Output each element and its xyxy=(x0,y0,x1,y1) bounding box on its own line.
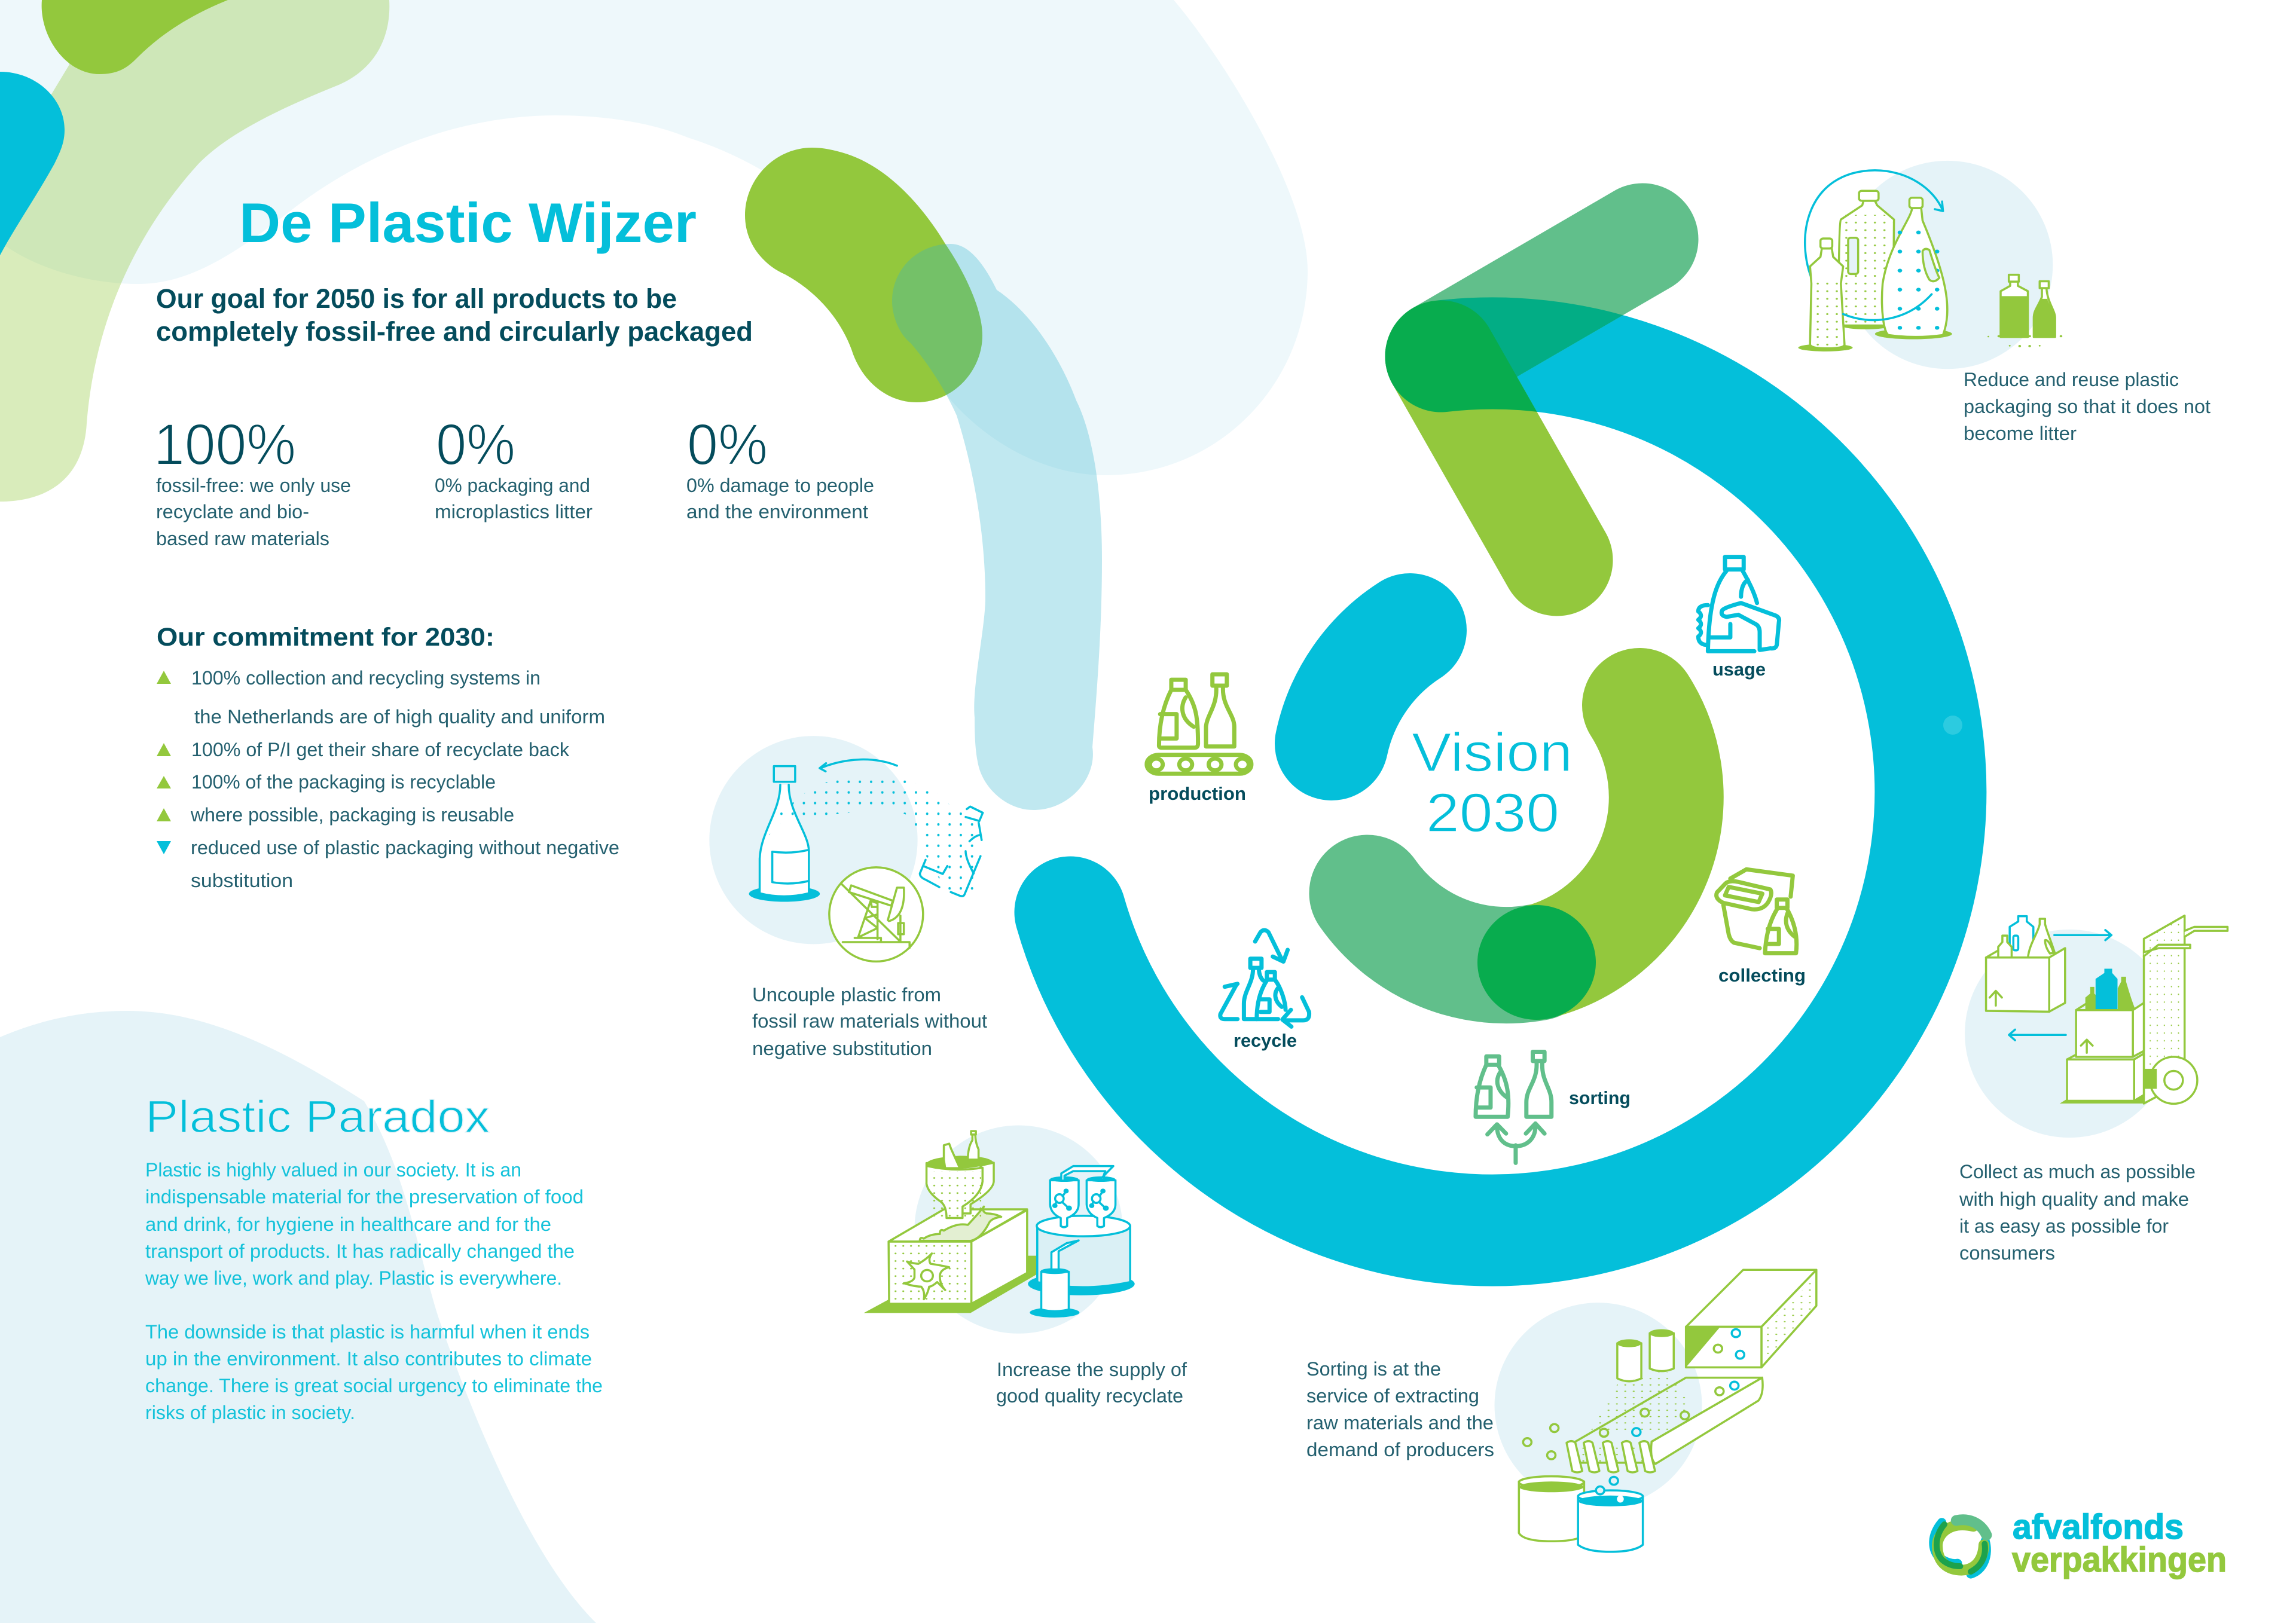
Plastic Paradox heading: Plastic Paradox xyxy=(145,1092,490,1142)
caption: uncouple xyxy=(752,984,987,1059)
logo wordmark xyxy=(2012,1508,2227,1579)
center text: Vision 2030: Vision xyxy=(1412,722,1573,783)
caption: recyclate: good quality recyclate xyxy=(996,1385,1183,1407)
subtitle: goal for 2050: completely fossil-free and circularly packaged xyxy=(156,316,753,347)
caption: uncouple: Uncouple plastic from xyxy=(752,984,941,1005)
step label: collecting: collecting xyxy=(1718,965,1806,986)
background: green corner blob xyxy=(42,0,228,74)
commitment list: substitution xyxy=(191,870,293,891)
caption: uncouple: fossil raw materials without xyxy=(752,1010,987,1032)
illustration: reduce and reuse bottles xyxy=(1798,161,2062,369)
caption: reduce and reuse: become litter xyxy=(1964,423,2077,444)
caption: recyclate: Increase the supply of xyxy=(997,1359,1187,1380)
illustration: sorting conveyor xyxy=(1495,1270,1816,1552)
stat: 0% damage: and the environment xyxy=(686,501,868,522)
stat: 0% damage xyxy=(686,412,874,522)
inner cycle: green arc xyxy=(1537,705,1666,962)
step label: production: production xyxy=(1149,783,1246,804)
step icon: collecting xyxy=(1717,869,1797,953)
center text: Vision 2030 xyxy=(1412,722,1573,843)
Plastic Paradox text: transport of products. It has radically changed the xyxy=(145,1240,575,1262)
step icon: recycle xyxy=(1220,930,1309,1026)
caption: collect: Collect as much as possible xyxy=(1959,1161,2196,1182)
caption: reduce and reuse: Reduce and reuse plastic xyxy=(1964,369,2179,390)
caption: collect: consumers xyxy=(1959,1242,2055,1264)
caption: collect: with high quality and make xyxy=(1959,1188,2189,1210)
subtitle: goal for 2050 xyxy=(156,283,753,347)
stat: 0% litter: microplastics litter xyxy=(435,501,593,522)
commitment list: where possible, packaging is reusable xyxy=(190,804,514,826)
Plastic Paradox text: up in the environment. It also contributes to climate xyxy=(145,1348,592,1370)
inner cycle: blue arc xyxy=(1332,630,1410,744)
commitment list: 100% of the packaging is recyclable xyxy=(191,771,496,793)
step icon: usage xyxy=(1698,557,1779,651)
Plastic Paradox text: risks of plastic in society. xyxy=(145,1402,355,1423)
background: light green swoosh xyxy=(0,0,389,502)
illustration: collection trolley and boxes xyxy=(1965,916,2228,1138)
caption: collect xyxy=(1959,1161,2196,1264)
Plastic Paradox text: Plastic is highly valued in our society. It is an xyxy=(145,1159,521,1181)
step icon: production xyxy=(1147,674,1251,774)
stat: 0% litter: 0% xyxy=(436,412,515,477)
commitment list: 100% of P/I get their share of recyclate back xyxy=(191,739,570,760)
stat: 0% litter xyxy=(435,412,593,522)
stat: 100% fossil-free: recyclate and bio- xyxy=(156,501,309,522)
step icon: sorting xyxy=(1476,1052,1552,1163)
outer cycle diagram: ring and bars xyxy=(1070,239,1962,1230)
stat: 100% fossil-free: fossil-free: we only use xyxy=(156,475,351,496)
logo wordmark: afvalfonds xyxy=(2013,1508,2184,1546)
stat: 0% litter: 0% packaging and xyxy=(435,475,590,496)
caption: uncouple: negative substitution xyxy=(752,1038,932,1059)
caption: reduce and reuse: packaging so that it does not xyxy=(1964,396,2210,417)
inner cycle: dark green overlap xyxy=(1477,905,1596,1020)
logo mark xyxy=(1934,1520,1986,1574)
commitment heading: Our commitment for 2030: xyxy=(157,623,494,652)
caption: sorting: service of extracting xyxy=(1306,1385,1479,1407)
step label: sorting: sorting xyxy=(1569,1087,1631,1108)
stat: 100% fossil-free xyxy=(154,412,351,549)
commitment list: 100% collection and recycling systems in xyxy=(191,667,541,689)
center text: Vision 2030: 2030 xyxy=(1426,783,1559,843)
background: pale blue top blob xyxy=(0,0,1308,475)
subtitle: goal for 2050: Our goal for 2050 is for all products to be xyxy=(156,283,677,314)
caption: sorting xyxy=(1306,1358,1494,1460)
caption: sorting: demand of producers xyxy=(1306,1439,1494,1460)
caption: reduce and reuse xyxy=(1964,369,2210,444)
commitment list: the Netherlands are of high quality and uniform xyxy=(194,706,605,728)
title: De Plastic Wijzer xyxy=(239,191,697,254)
Plastic Paradox text xyxy=(145,1159,603,1423)
illustration: recycling plant xyxy=(864,1126,1135,1334)
Plastic Paradox text: and drink, for hygiene in healthcare and for the xyxy=(145,1214,551,1235)
stat: 100% fossil-free: 100% xyxy=(154,412,296,477)
commitment list xyxy=(157,667,619,891)
decorative green blob near the title xyxy=(745,148,982,402)
decorative translucent blue band xyxy=(892,244,1102,810)
commitment list: reduced use of plastic packaging without negative xyxy=(191,837,619,858)
stat: 0% damage: 0% damage to people xyxy=(686,475,874,496)
step label: usage: usage xyxy=(1712,659,1766,680)
illustration: uncouple from fossil xyxy=(709,736,983,961)
Plastic Paradox text: The downside is that plastic is harmful when it ends xyxy=(145,1321,590,1343)
logo wordmark: verpakkingen xyxy=(2012,1541,2227,1579)
Plastic Paradox text: indispensable material for the preservation of food xyxy=(145,1186,584,1208)
caption: sorting: Sorting is at the xyxy=(1306,1358,1441,1380)
Plastic Paradox text: change. There is great social urgency to eliminate the xyxy=(145,1375,603,1396)
background: cyan edge blob xyxy=(0,72,65,255)
stat: 0% damage: 0% xyxy=(687,412,768,477)
background: pale blue bottom-left blob xyxy=(0,1011,596,1623)
caption: recyclate xyxy=(996,1359,1187,1407)
caption: collect: it as easy as possible for xyxy=(1959,1215,2169,1237)
Plastic Paradox text: way we live, work and play. Plastic is everywhere. xyxy=(145,1267,562,1289)
inner cycle: medium green arc xyxy=(1367,893,1537,965)
step label: recycle: recycle xyxy=(1234,1030,1297,1051)
stat: 100% fossil-free: based raw materials xyxy=(156,528,329,549)
caption: sorting: raw materials and the xyxy=(1306,1412,1494,1434)
